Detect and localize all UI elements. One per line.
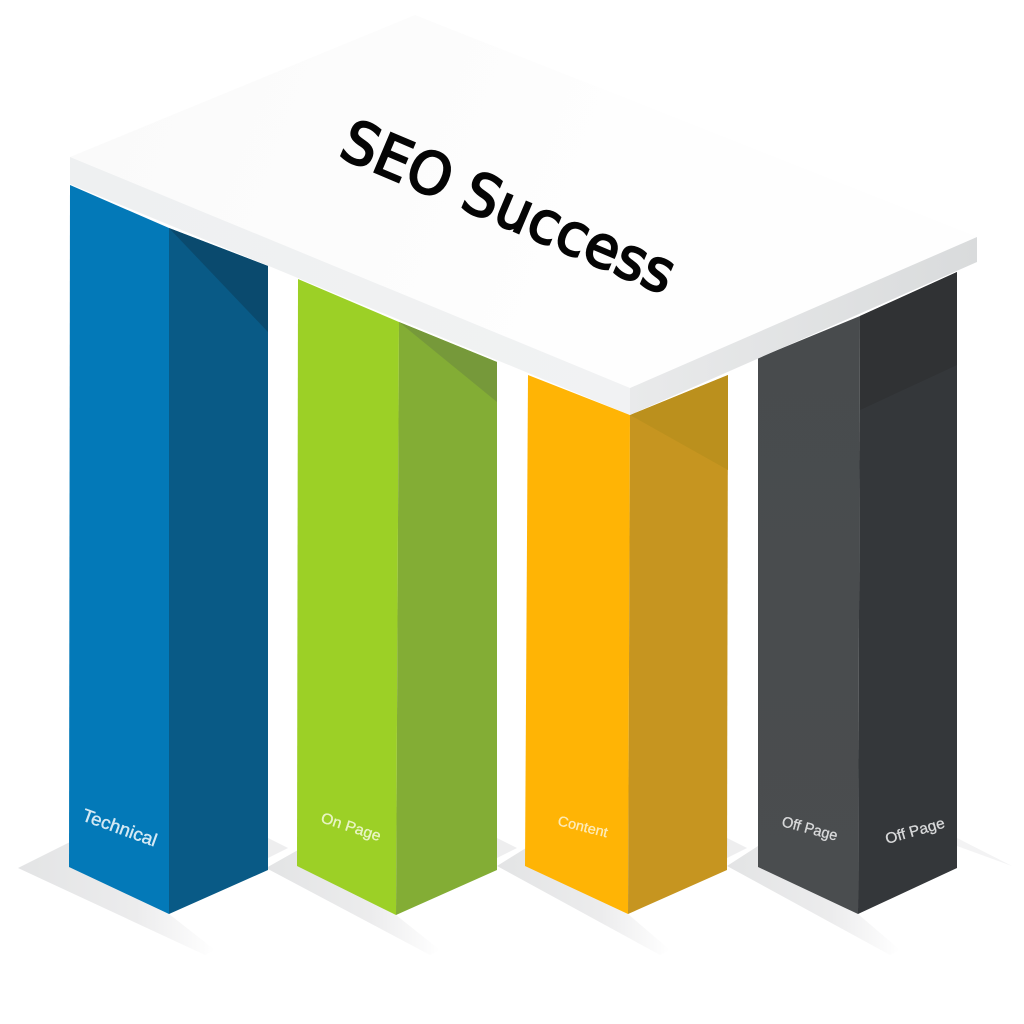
label: Technical: Technical — [80, 805, 160, 850]
pillar: Technical — [69, 185, 268, 914]
pillar: Off Page — [758, 272, 957, 914]
label: Off Page front: Off Page — [780, 813, 839, 845]
floor shadows — [18, 838, 1012, 955]
label: Off Page side: Off Page — [883, 815, 947, 848]
pillar: On Page — [297, 279, 497, 915]
label: On Page: On Page — [319, 810, 383, 845]
pillar: Content — [525, 375, 728, 914]
title: SEO Success — [332, 106, 686, 308]
label: Content: Content — [556, 812, 610, 840]
roof slab — [70, 15, 977, 415]
